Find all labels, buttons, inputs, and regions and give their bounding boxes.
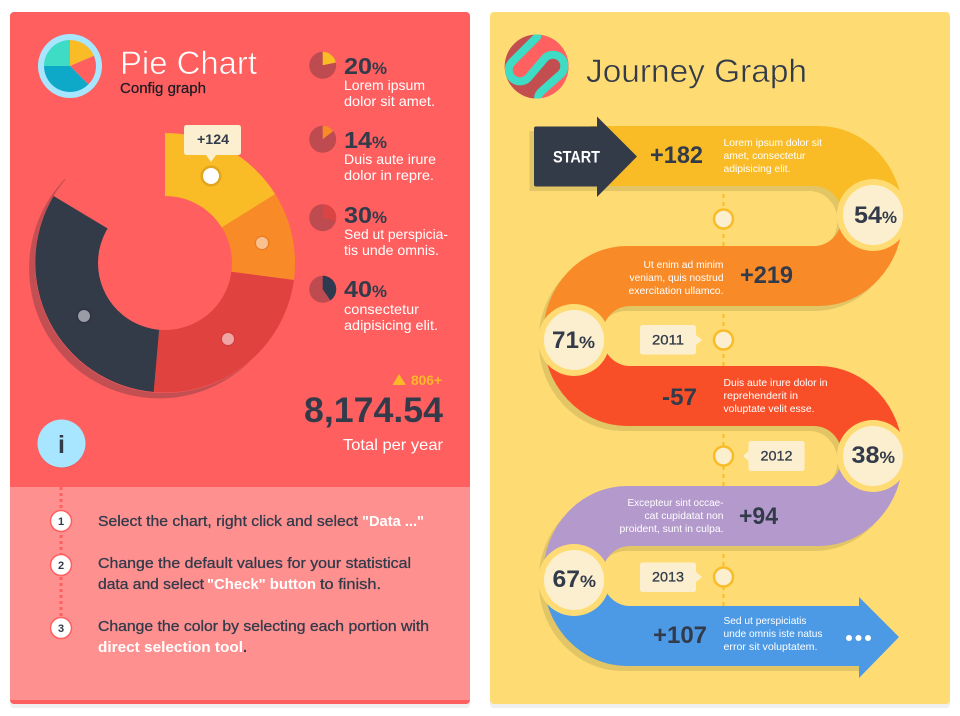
legend item: 30% [309,202,448,258]
text: blue ribbon: unde omnis iste natus [724,628,822,640]
step 2 [50,554,72,576]
donut chart [29,125,295,398]
icon: three dots [846,635,871,641]
marker: yellow [200,166,222,186]
marker: dark [76,308,92,324]
text: orange ribbon: veniam, quis nostrud [630,272,724,284]
segment: red [154,263,294,392]
legend item: 30%: tis unde omnis. [344,242,439,258]
panel: pie chart [10,12,470,708]
timeline node 2 [714,330,733,350]
step 3: 3 [58,623,64,635]
arrow: start: START [553,148,601,166]
legend item: 20%: dolor sit amet. [344,93,435,109]
badge: 38%: % [880,448,895,467]
label: 2012 [743,441,804,471]
donut shadow [29,179,249,398]
badge: 54% [837,179,909,251]
label: 2011: 2011 [652,332,684,348]
ribbon: orange [543,216,903,336]
heading: Journey Graph: Journey Graph [586,53,807,89]
text: red ribbon: voluptate velit esse. [724,403,814,415]
donut hole [98,196,232,330]
ribbon shadow [530,131,898,671]
total per year [304,372,444,454]
legend item: 40%: consectetur [344,301,419,317]
value: +107: +107 [653,622,707,649]
text: purple ribbon: cat cupidatat non [644,510,724,522]
instruction text 3: . [243,640,247,656]
text: red ribbon: Duis aute irure dolor in [724,377,828,389]
text: yellow ribbon: Lorem ipsum dolor sit [724,137,822,149]
legend item: 14%: 14 [344,127,372,153]
ribbon: red [543,336,903,456]
legend item: 14%: Duis aute irure [344,151,436,167]
legend item: 14% [309,126,436,183]
instruction text 3 [98,619,429,656]
segment: dark [35,196,165,392]
badge: 38% [837,420,909,492]
legend item: 14%: dolor in repre. [344,167,434,183]
legend item: 40% [309,276,438,333]
icon: up triangle [392,374,406,385]
text: orange ribbon: Ut enim ad minim [644,259,724,271]
legend item: 30%: % [372,208,387,227]
panel: instructions background [10,487,470,700]
text: yellow ribbon: adipisicing elit. [724,163,790,175]
instruction text 2: "Check" button [207,577,316,593]
step 3 [50,618,72,638]
icon: info [38,420,86,468]
instruction text 1: "Data ..." [362,514,424,530]
badge: 71%: % [579,333,595,352]
legend item: 30%: 30 [344,202,372,228]
text: orange ribbon [628,259,724,297]
dashed timeline [722,186,724,606]
text: purple ribbon: Excepteur sint occae- [628,497,724,509]
text: orange ribbon: exercitation ullamco. [628,285,724,297]
icon: info: i [58,431,65,459]
value: +182: +182 [650,142,703,169]
legend item: 20%: 20 [344,53,372,79]
arrow: start [534,116,637,197]
step 1 [50,510,72,532]
text: blue ribbon: error sit voluptatem. [724,641,818,653]
legend item: 40%: % [372,282,387,301]
instruction text 2: data and select [98,577,204,593]
legend item: 40%: adipisicing elit. [344,317,438,333]
segment: orange [165,194,295,280]
value: +219: +219 [740,262,793,289]
badge: 54%: % [882,208,897,227]
instruction text 2 [98,556,411,593]
text: blue ribbon [724,615,822,653]
timeline node 3 [714,446,733,466]
text: yellow ribbon [724,137,822,175]
instruction text 2: to finish. [320,577,381,593]
instruction text 2: Change the default values for your statistical [98,556,411,572]
badge: 71%: 71 [552,327,579,354]
total per year: 8,174.54 [304,391,444,430]
total per year: Total per year [343,437,444,454]
timeline node 1 [714,210,733,228]
icon: pie chart [38,34,102,98]
badge: 67%: 67 [552,566,580,593]
heading: Pie Chart: Pie Chart [120,45,257,81]
instruction text 3: direct selection tool [98,640,243,656]
subheading: Config graph: Config graph [120,80,206,97]
instruction text 1: Select the chart, right click and select [98,514,358,530]
callout: +124: +124 [197,132,230,147]
value: -57: -57 [662,384,697,411]
legend item: 40%: 40 [344,276,372,302]
legend item: 30%: Sed ut perspicia- [344,226,448,242]
callout: +124 [184,125,241,162]
marker: orange [254,236,270,250]
text: yellow ribbon: amet, consectetur [724,150,806,162]
label: 2013 [640,562,702,592]
ribbon: purple [543,456,903,576]
ribbon: yellow [590,126,903,216]
text: red ribbon [724,377,828,415]
instruction text 3: Change the color by selecting each portion with [98,619,429,635]
badge: 67%: % [580,572,596,591]
ribbon: blue arrow [543,576,899,678]
step 1: 1 [58,516,64,528]
badge: 71% [538,304,610,376]
label: 2011 [640,325,702,354]
total per year: 806+ [411,372,442,388]
text: purple ribbon [620,497,724,535]
badge: 38%: 38 [852,442,880,469]
value: +94: +94 [739,503,779,530]
step 2: 2 [58,560,64,572]
legend item: 20% [309,52,435,109]
panel: journey graph [490,12,950,708]
icon: winding road [504,34,569,98]
text: purple ribbon: proident, sunt in culpa. [620,523,724,535]
text: red ribbon: reprehenderit in [724,390,798,402]
legend item: 20%: Lorem ipsum [344,77,425,93]
badge: 54%: 54 [854,202,883,229]
timeline node 4 [714,568,733,586]
label: 2013: 2013 [652,568,684,584]
segment: yellow [165,133,275,263]
label: 2012: 2012 [760,448,793,464]
marker: red [220,332,236,346]
steps timeline [50,487,72,638]
badge: 67% [538,544,610,616]
legend item: 14%: % [372,133,387,152]
values [650,142,793,649]
legend item: 20%: % [372,59,387,78]
text: blue ribbon: Sed ut perspiciatis [724,615,806,627]
